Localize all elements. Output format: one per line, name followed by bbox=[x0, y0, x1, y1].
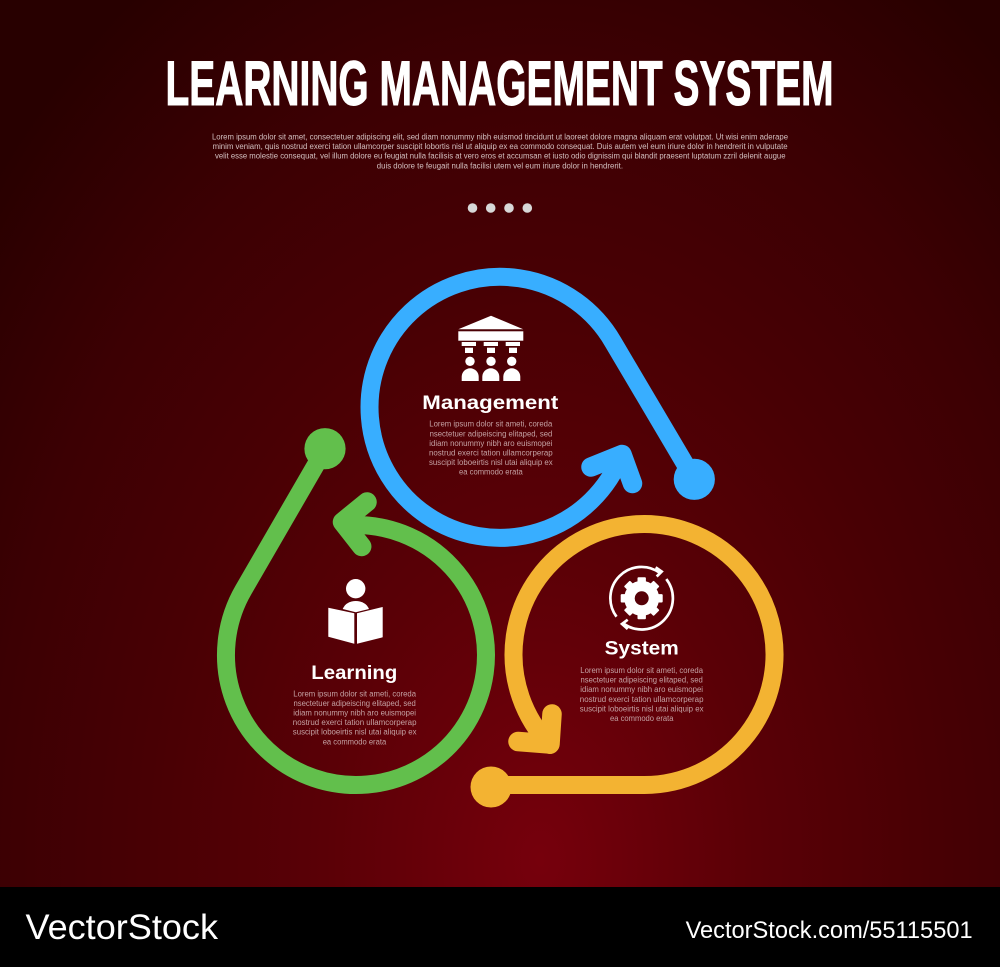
intro paragraph: Lorem ipsum dolor sit amet, consectetuer adipiscing elit, sed diam nonummy nibh euismod tincidunt ut laoreet dolore magna aliquam erat volutpat. Ut wisi enim aderape bbox=[212, 132, 789, 142]
text block: system: nsectetuer adipeiscing elitaped, sed bbox=[580, 676, 703, 685]
text block: learning: Lorem ipsum dolor sit ameti, coreda bbox=[293, 689, 417, 698]
text block: system: idiam nonummy nibh aro euismopei bbox=[580, 685, 703, 694]
icon: institution with people bbox=[458, 316, 523, 381]
icon: reader with open book bbox=[328, 579, 383, 644]
heading: system: System bbox=[605, 637, 679, 659]
intro paragraph bbox=[212, 132, 789, 170]
footer bar bbox=[0, 887, 1000, 967]
panel: learning bbox=[226, 428, 486, 785]
intro paragraph: minim veniam, quis nostrud exerci tation ullamcorper suscipit lobortis nisl ut aliquip ex ea commodo consequat. Duis autem vel eum iriure dolor in hendrerit in vulputate bbox=[213, 142, 788, 151]
yellow loop arrow bbox=[470, 524, 775, 808]
panel: management bbox=[370, 277, 715, 538]
text block: management: suscipit loboeirtis nisl utai aliquip ex bbox=[429, 458, 553, 467]
blue loop arrow bbox=[370, 277, 715, 538]
text block: learning: nostrud exerci tation ullamcorperap bbox=[293, 718, 417, 727]
green loop arrow bbox=[226, 428, 486, 785]
text block: management: nsectetuer adipeiscing elitaped, sed bbox=[430, 429, 552, 438]
text block: system: Lorem ipsum dolor sit ameti, coreda bbox=[580, 666, 704, 675]
text block: system: suscipit loboeirtis nisl utai aliquip ex bbox=[580, 704, 704, 713]
footer image id: VectorStock.com/55115501 bbox=[686, 917, 973, 944]
text block: management: idiam nonummy nibh aro euismopei bbox=[429, 439, 553, 448]
heading: learning: Learning bbox=[311, 662, 397, 684]
text block: learning: nsectetuer adipeiscing elitaped, sed bbox=[294, 699, 416, 708]
panel: system bbox=[470, 524, 775, 808]
text block: learning: ea commodo erata bbox=[323, 737, 387, 746]
intro paragraph: duis dolore te feugait nulla facilisi utem vel eum iriure dolor in hendrerit. bbox=[377, 161, 623, 170]
text block: management: nostrud exerci tation ullamcorperap bbox=[429, 448, 553, 458]
footer logo text: VectorStock bbox=[26, 908, 219, 947]
text block: learning bbox=[293, 689, 417, 746]
text block: learning: idiam nonummy nibh aro euismopei bbox=[293, 708, 416, 718]
icon: gear with rotating arrows bbox=[610, 567, 673, 629]
text block: system bbox=[580, 666, 704, 723]
text block: management: ea commodo erata bbox=[459, 468, 523, 477]
pagination dots bbox=[468, 203, 532, 213]
text block: management: Lorem ipsum dolor sit ameti, coreda bbox=[429, 420, 553, 429]
text block: management bbox=[429, 420, 553, 477]
text block: learning: suscipit loboeirtis nisl utai aliquip ex bbox=[293, 728, 417, 737]
text block: system: nostrud exerci tation ullamcorperap bbox=[580, 695, 704, 704]
intro paragraph: velit esse molestie consequat, vel illum dolore eu feugiat nulla facilisis at vero eros et accumsan et iusto odio dignissim qui blandit praesent luptatum zzril delenit augue bbox=[215, 152, 786, 161]
text block: system: ea commodo erata bbox=[610, 714, 674, 723]
heading: management: Management bbox=[422, 392, 559, 414]
